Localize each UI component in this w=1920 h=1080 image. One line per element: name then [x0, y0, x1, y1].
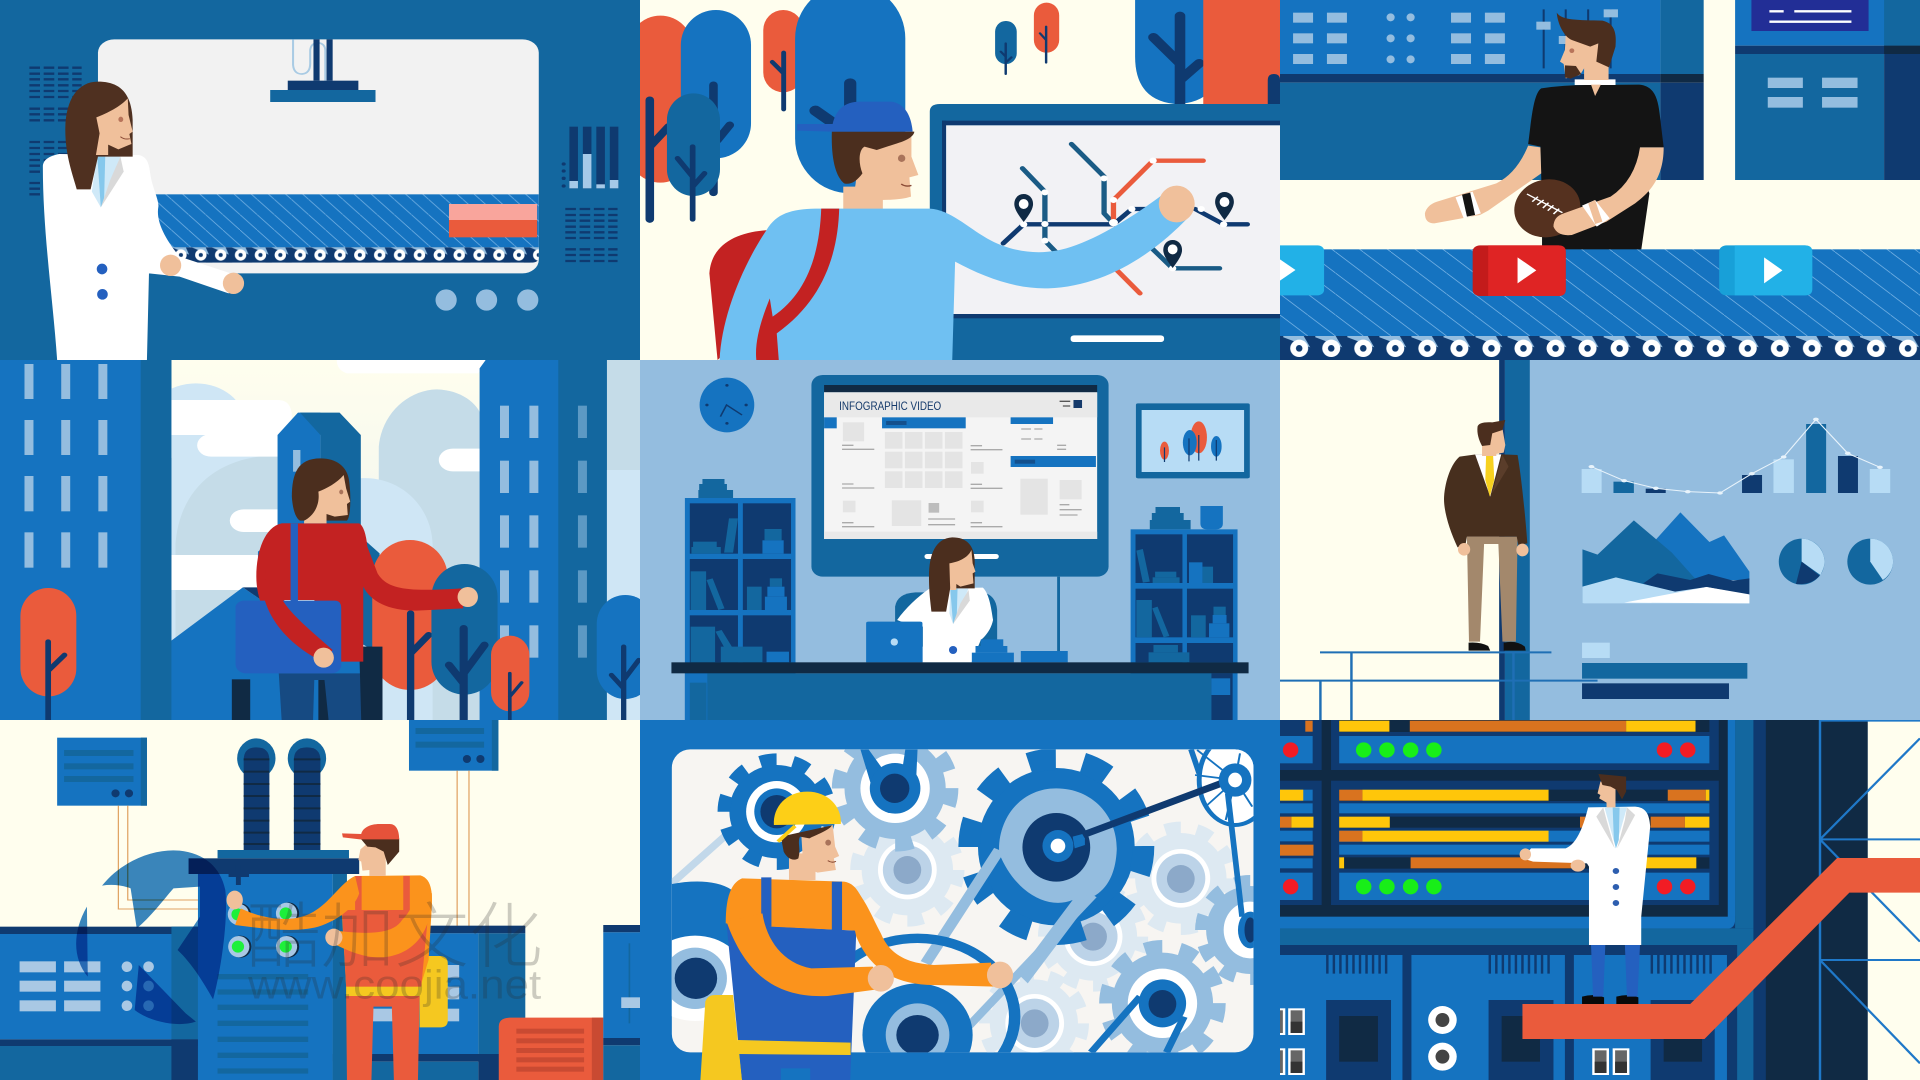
machine right — [1735, 0, 1920, 180]
twin pipes — [237, 738, 326, 850]
machine left — [0, 927, 198, 1080]
switches — [1270, 1009, 1628, 1074]
trees beside woman — [372, 540, 654, 720]
indicator dashes left — [29, 68, 82, 194]
figure: worker in overalls — [227, 824, 448, 1080]
red crate — [499, 1018, 603, 1080]
control lights — [436, 289, 538, 311]
figure: scientist — [1520, 774, 1650, 1004]
faders — [1536, 9, 1618, 68]
monitor page layout — [824, 400, 1096, 559]
figure: woman in lab coat — [43, 82, 244, 360]
big gear — [926, 759, 1144, 1050]
figure: businessman — [1444, 420, 1529, 651]
paperclip cable — [293, 39, 325, 81]
control buttons — [228, 902, 299, 958]
play button cyan right — [1719, 245, 1812, 295]
watermark text: 酷加文化 — [247, 879, 543, 983]
figure: football player — [1425, 13, 1664, 250]
balcony rail — [1280, 652, 1598, 720]
central tower — [278, 413, 361, 527]
far right backdrop — [607, 360, 640, 720]
small distant trees — [995, 3, 1059, 74]
play button red — [1473, 245, 1566, 296]
lower console — [1270, 945, 1735, 1080]
wall box one — [57, 738, 147, 806]
rack frame — [1280, 720, 1753, 945]
wall box two — [409, 720, 498, 771]
lower wheel with hub — [855, 934, 1020, 1052]
belt lines pale — [672, 834, 726, 884]
monitor — [811, 375, 1109, 577]
panel: lab scientist at conveyor screen — [29, 39, 618, 360]
lower left pulley — [672, 882, 734, 1021]
gear top left — [724, 760, 829, 864]
tree group left — [628, 10, 803, 219]
scaffold lines — [1820, 720, 1920, 1080]
rack top row — [1280, 720, 1709, 763]
tree left — [20, 588, 76, 720]
level bars — [562, 127, 618, 188]
wires — [118, 771, 469, 927]
panel: scientist at server rack and stairs — [1280, 720, 1920, 1080]
panel: man pointing at subway map — [640, 0, 1280, 360]
panel: office with infographic monitor — [640, 360, 1280, 720]
panel: businessman and data charts — [1280, 360, 1920, 720]
panel: player with football at video conveyor — [1280, 0, 1920, 360]
wall clock — [700, 378, 754, 432]
desk — [671, 662, 1249, 720]
figure: woman at desk — [895, 537, 997, 662]
press head — [270, 39, 376, 102]
play button cyan left — [1264, 245, 1324, 295]
figure: construction worker — [700, 792, 1013, 1080]
mountain area chart — [1582, 512, 1749, 603]
machine screen — [98, 39, 539, 273]
stacked books on desk — [972, 639, 1014, 662]
panel: woman with messenger bag in city — [0, 360, 640, 720]
pie chart two — [1847, 539, 1893, 585]
map pins — [1014, 192, 1234, 268]
machine right — [333, 926, 525, 1080]
wheel top right — [1188, 749, 1254, 917]
bar chart horizontal — [1582, 643, 1747, 699]
control column — [189, 850, 359, 1080]
sockets — [1428, 1006, 1457, 1071]
cream wall and pillar — [1280, 360, 1530, 720]
trees top right — [1135, 0, 1280, 104]
pale gears — [856, 820, 1232, 1072]
indicator dashes right — [565, 209, 618, 261]
light blue gears — [839, 732, 1299, 1060]
machine left — [1280, 0, 1704, 180]
clouds and distant shapes — [147, 360, 504, 722]
tall blue tree behind man — [795, 0, 905, 193]
watermark logo — [76, 850, 226, 1024]
framed tree picture — [1136, 403, 1250, 478]
panel: worker operating machine — [0, 720, 640, 1080]
right building — [480, 360, 607, 720]
left bookshelf — [685, 479, 796, 720]
right bookshelf — [1131, 506, 1238, 720]
machine far right — [603, 925, 640, 1080]
control rectangles and knobs — [1293, 13, 1505, 64]
conveyor belt — [1280, 249, 1920, 360]
figure: man with backpack — [709, 102, 1195, 360]
left building — [0, 360, 171, 720]
red staircase — [1522, 858, 1920, 1039]
monitor title: INFOGRAPHIC VIDEO — [839, 399, 941, 413]
panel: engineer with gears — [640, 720, 1280, 1080]
monitor — [930, 104, 1280, 360]
house — [163, 537, 382, 720]
subway map — [1003, 144, 1247, 293]
rack lower rows — [1280, 790, 1709, 900]
laptop — [866, 622, 922, 662]
salmon package — [449, 204, 537, 237]
crank arm — [1083, 763, 1251, 835]
conveyor belt — [147, 194, 539, 263]
column chart with trend line — [1582, 418, 1890, 495]
pie chart one — [1779, 539, 1824, 585]
monitor stand — [1021, 577, 1068, 662]
figure: woman with bag — [236, 458, 478, 720]
right structure strips — [1737, 720, 1920, 1080]
watermark text: www.coojia.net — [247, 962, 542, 1007]
